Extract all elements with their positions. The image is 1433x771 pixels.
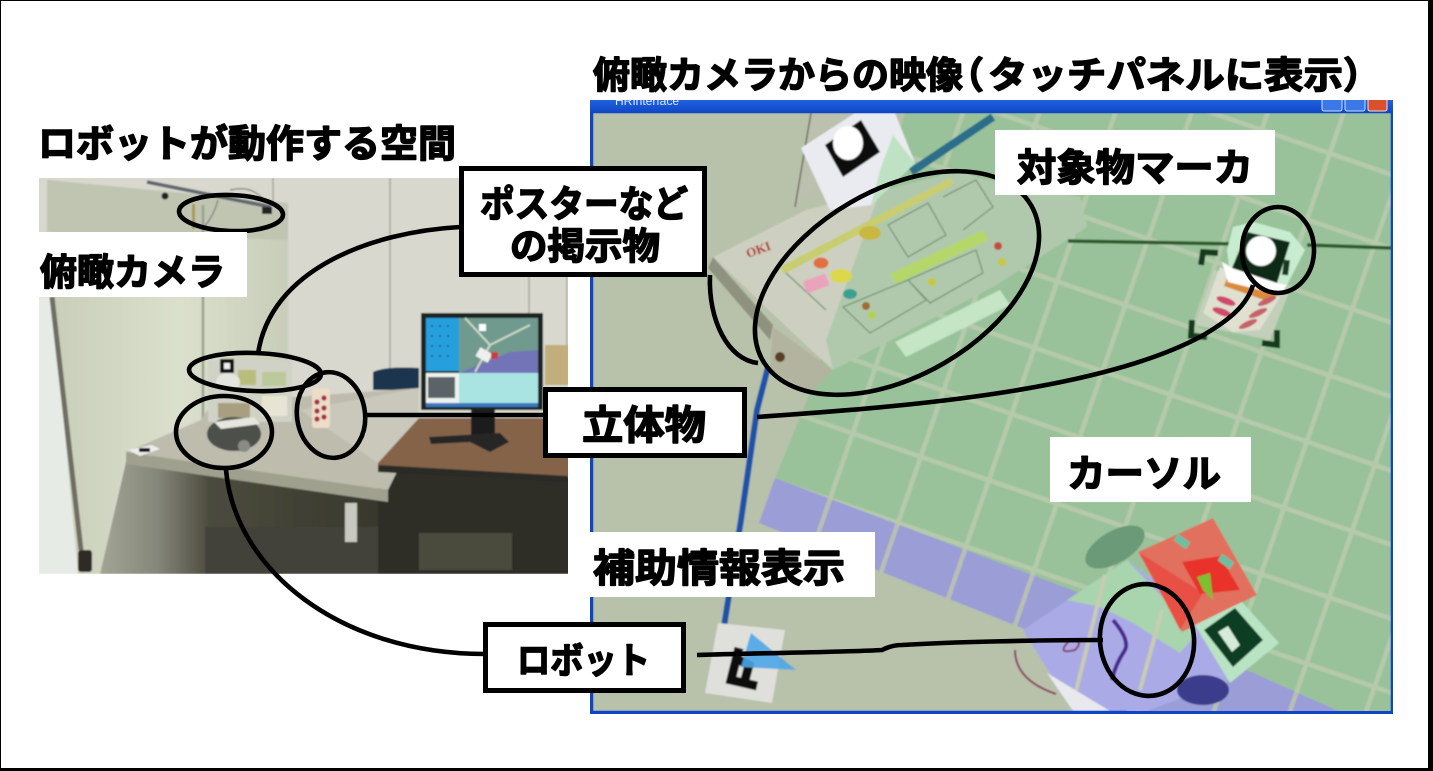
bottom left marker: [705, 623, 796, 703]
overhead camera rig: [147, 182, 272, 229]
under desk area: [100, 462, 388, 574]
poster stand: [895, 290, 1010, 357]
panel: room photo: [38, 177, 570, 574]
wooden desk: [378, 418, 570, 482]
ellipse: poster in room: [188, 351, 322, 393]
white can: [312, 388, 330, 428]
ellipse: object marker: [1242, 207, 1314, 293]
label: solid object: 立体物: [582, 404, 706, 448]
ellipse: robot in room: [176, 396, 272, 468]
label: robot: ロボット: [517, 640, 650, 681]
title: overhead camera view: （: [947, 55, 984, 96]
partition wall: [54, 239, 288, 574]
red cursor: [1138, 518, 1257, 632]
leader line: robot right: [697, 640, 1103, 655]
leader line: cylinder: [757, 285, 1253, 417]
window title bar: [590, 94, 1393, 113]
poster on table: [208, 359, 292, 422]
dark green rod: [1068, 241, 1391, 248]
title: overhead camera view: タッチパネルに表示: [988, 55, 1343, 96]
top marker card: [801, 113, 915, 210]
label: posters: の掲示物: [510, 226, 660, 267]
label: posters: [462, 168, 704, 274]
label: overhead camera: [38, 232, 247, 297]
title: overhead camera view: 俯瞰カメラからの映像: [593, 55, 963, 96]
label: auxiliary info: 補助情報表示: [593, 548, 845, 591]
monitor: [421, 313, 543, 452]
label: robot: [486, 624, 684, 690]
blue chair: [373, 368, 419, 390]
panel: overhead camera view: [590, 94, 1393, 714]
cylinder object: [1195, 222, 1305, 340]
wheel: [1085, 525, 1146, 569]
cardboard box: [545, 345, 569, 385]
robot platform sheet: [1015, 560, 1230, 711]
ellipse: poster in view: [716, 125, 1078, 441]
leader line: solid object: [366, 413, 545, 417]
label: cursor: カーソル: [1067, 454, 1221, 496]
blue tape line: [722, 367, 768, 640]
label: overhead camera: 俯瞰カメラ: [40, 252, 225, 293]
ellipse: overhead camera: [178, 193, 284, 233]
label: posters: ポスターなど: [480, 184, 688, 225]
green floor grid: [775, 113, 1391, 714]
label: solid object: [546, 390, 744, 456]
leader line: poster: [258, 227, 460, 354]
corner brackets: [1191, 252, 1287, 345]
poster plate: OKI: [744, 238, 773, 261]
title: overhead camera view: ）: [1343, 55, 1380, 96]
window title bar: HRInterface: [615, 94, 679, 108]
gray desk: [126, 388, 419, 502]
ellipse: object in room: [291, 368, 371, 462]
lavender band: [759, 478, 1345, 714]
robot: [207, 403, 261, 452]
label: object marker: [995, 130, 1275, 195]
title: overhead camera view: [590, 48, 1393, 100]
leader line: robot left: [226, 470, 485, 654]
heading: robot workspace: ロボットが動作する空間: [38, 124, 456, 166]
poster plate: [708, 173, 1087, 393]
label: auxiliary info: [590, 532, 875, 597]
robot marker: [1195, 602, 1279, 683]
floor background: [593, 113, 1074, 711]
label: object marker: 対象物マーカ: [1017, 148, 1253, 190]
ellipse: robot in view: [1094, 579, 1200, 701]
leader line: poster right: [710, 275, 758, 363]
label: cursor: [1050, 437, 1251, 502]
